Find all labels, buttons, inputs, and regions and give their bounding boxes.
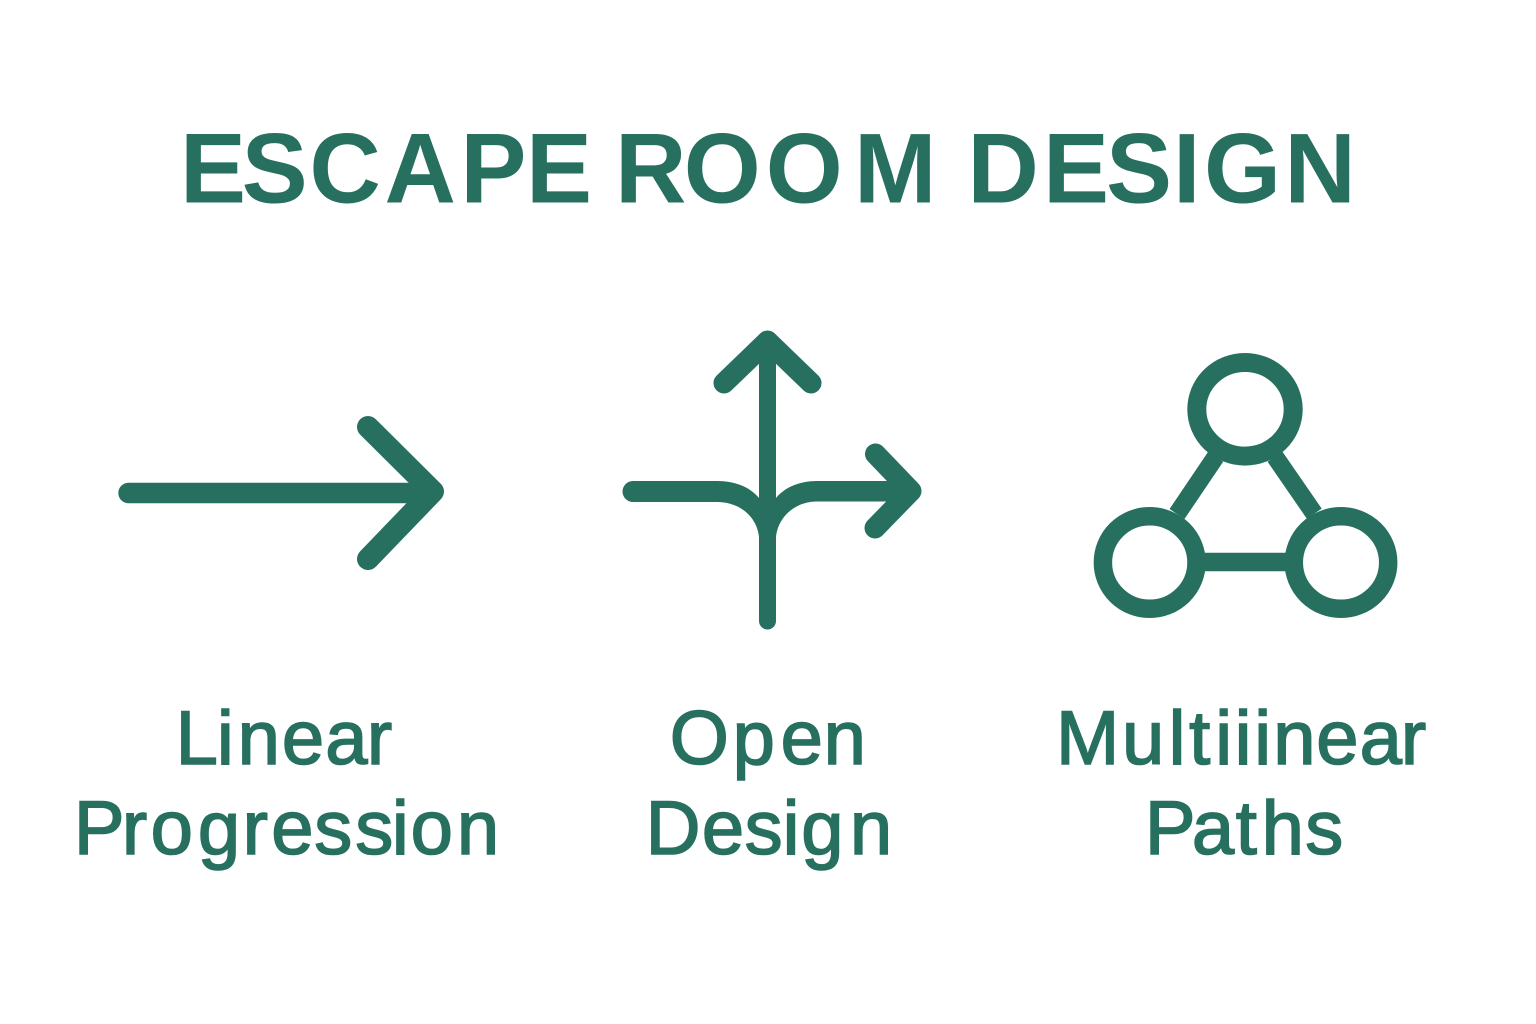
icon: open design branching arrows bbox=[622, 341, 911, 621]
label: linear progression: Linear bbox=[176, 696, 392, 781]
label: open design: Design bbox=[646, 786, 892, 871]
label: linear progression: Progression bbox=[74, 786, 499, 871]
label: open design bbox=[646, 696, 892, 871]
icon: linear arrow bbox=[129, 427, 433, 559]
label: multilinear paths: Paths bbox=[1145, 786, 1343, 871]
icon: multilinear network bbox=[1103, 362, 1388, 609]
title: ESCAPE ROOM DESIGN bbox=[180, 112, 1356, 224]
label: linear progression bbox=[74, 696, 499, 871]
label: multilinear paths: Multiiinear bbox=[1056, 696, 1426, 781]
label: multilinear paths bbox=[1056, 696, 1426, 871]
label: open design: Open bbox=[670, 696, 866, 781]
